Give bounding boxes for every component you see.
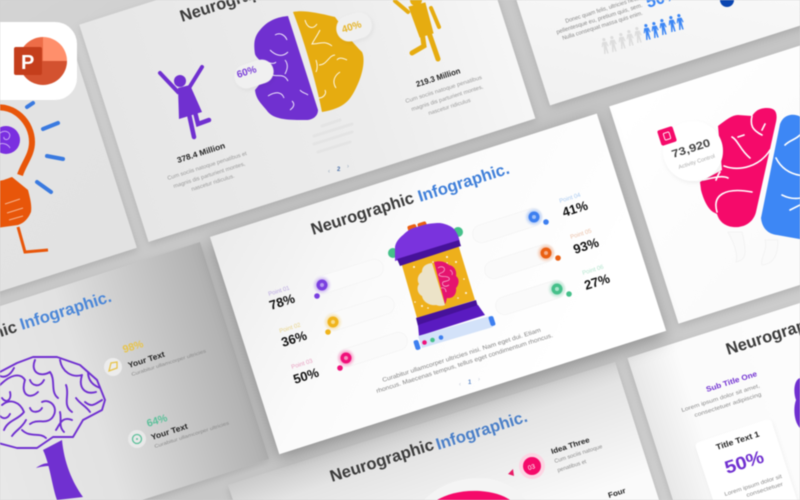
brain folds <box>438 267 452 292</box>
bubble: 40%: 40% <box>341 19 363 36</box>
panel: bottom center slide <box>328 408 627 500</box>
panel: top slide with gender brain <box>160 0 485 193</box>
point 01 <box>267 278 330 313</box>
jar body <box>401 244 475 318</box>
callout: 73,920: Activity Control <box>678 154 716 171</box>
card: title text 1: Title Text 1 <box>715 429 761 452</box>
icon: outline brain <box>0 357 105 448</box>
knobs <box>388 221 463 258</box>
text: idea three <box>550 435 603 474</box>
point 05: 93% <box>571 235 601 257</box>
brain right half <box>434 261 459 304</box>
node: 03 <box>508 453 545 479</box>
icon: blue rays <box>27 103 63 192</box>
stat: 64%: Your Text <box>150 422 189 442</box>
point 03: 50% <box>291 365 321 387</box>
card: title text 1 <box>696 420 797 500</box>
text block: description: rhoncus. Maecenas tempus, tellus eget condimentum rhoncus. <box>376 333 554 395</box>
icon: tree stem <box>36 440 83 500</box>
icon: PowerPoint app tile <box>0 22 77 100</box>
text: idea three: penatibus et <box>557 459 588 474</box>
icon: faint roots <box>728 232 778 265</box>
panel: bottom right slide <box>681 309 800 500</box>
plinth <box>418 316 493 348</box>
brain left half <box>418 263 445 306</box>
brain: blue half <box>761 115 800 240</box>
stat: 64% <box>128 412 231 450</box>
icon: brain jar <box>388 221 496 351</box>
text block: left description: Cum sociis natoque penatibus et <box>167 151 248 182</box>
card: title text 1: Lorem ipsum dolor sit <box>724 474 783 498</box>
text block: Lorem ipsum dolor sit amet, <box>681 383 761 414</box>
point 04 <box>526 192 590 225</box>
point 05 <box>538 228 601 261</box>
pagination: 1 <box>468 380 472 386</box>
stat: 64%: Curabitur ullamcorper ultricies <box>154 420 231 450</box>
stat: 98%: Your Text <box>127 350 166 370</box>
icon: faint bulb base <box>314 120 352 152</box>
icon: blue circle <box>720 0 734 7</box>
point 06: Point 06 <box>582 264 605 277</box>
brain: pink half <box>700 108 777 227</box>
subtitle: Sub Title One <box>705 369 758 394</box>
text: idea four: Four <box>607 486 627 500</box>
point 03 <box>291 350 354 387</box>
label: 219.3 Million: 219.3 Million <box>415 66 462 89</box>
powerpoint logo: P <box>21 52 34 74</box>
pagination: ‹ <box>459 382 461 388</box>
text block: right description: magnis dis parturient montes, <box>411 84 485 113</box>
pagination: › <box>478 377 480 383</box>
bubble: 40% <box>333 9 375 45</box>
bubble: 60% <box>231 56 277 92</box>
pagination: › <box>347 164 349 170</box>
jar base <box>418 305 485 336</box>
point 02: 36% <box>279 328 309 350</box>
card: title text 1: 50% <box>722 447 766 478</box>
point 01: 78% <box>267 291 297 313</box>
panel: top right slide <box>556 0 734 54</box>
icon: man <box>395 0 439 59</box>
plinth lights <box>422 335 443 345</box>
handles <box>413 315 496 351</box>
point 04: Point 04 <box>559 192 582 205</box>
text block <box>681 383 762 419</box>
text block: left description: nascetur ridiculus. <box>191 173 236 193</box>
text: idea three: Idea Three <box>550 435 591 456</box>
point 05: Point 05 <box>570 228 593 241</box>
pictogram: people <box>600 13 685 54</box>
point 04: 41% <box>560 198 590 220</box>
point 02 <box>279 314 340 350</box>
pagination: 2 <box>337 167 341 173</box>
base band <box>416 300 478 326</box>
dome band <box>397 240 461 266</box>
point 03: Point 03 <box>291 358 314 371</box>
pagination <box>328 164 349 175</box>
icon: pink square <box>657 126 677 146</box>
panel: left tree brain slide <box>0 288 231 500</box>
stat: 98%: 98% <box>121 338 146 356</box>
icon: woman <box>160 67 209 137</box>
title <box>0 288 114 368</box>
text block: right description: Cum sociis natoque penatibus <box>405 75 483 105</box>
icon: pink brain <box>424 478 526 500</box>
sparkles <box>413 256 467 309</box>
text block: right description: nascetur ridiculus <box>428 98 472 117</box>
text block: right description <box>405 75 485 117</box>
text block: Nulla consequat massa quis enim. <box>562 11 644 42</box>
point 01: Point 01 <box>268 285 291 298</box>
card: title text 1: consectetuer <box>746 482 784 499</box>
pagination: ‹ <box>328 169 330 175</box>
node: 03: 03 <box>527 463 536 472</box>
stat: 98%: Curabitur ullamcorper ultricies <box>131 348 208 378</box>
pagination <box>459 377 480 388</box>
text block: left description: magnis dis parturient montes, <box>173 161 247 190</box>
brain: purple and gold halves <box>254 11 364 120</box>
title <box>328 408 530 486</box>
text block: pellentesque eu, pretium quis, sem. <box>556 3 644 36</box>
stat: 98% <box>104 338 208 378</box>
title: Infographic. <box>434 408 530 454</box>
label: 378.4 Million: 378.4 Million <box>176 141 226 165</box>
point 06: 27% <box>582 271 612 293</box>
text: idea three: Cum sociis natoque <box>554 444 603 465</box>
bubble: 60%: 60% <box>236 64 258 81</box>
panel: center main slide <box>267 160 612 395</box>
callout: 73,920: 73,920 <box>670 137 712 161</box>
icon: purple blob <box>794 378 800 428</box>
text block: consectetuer adipiscing <box>694 392 762 419</box>
title: Infographic. <box>416 160 512 206</box>
point 02: Point 02 <box>279 322 302 335</box>
text block: left description <box>167 151 248 193</box>
neumorphic pills <box>312 206 567 369</box>
title <box>309 160 512 239</box>
icon: light bulb <box>0 107 48 252</box>
point 06 <box>550 264 612 297</box>
title: Neurographic <box>309 189 416 239</box>
jar dome <box>395 223 460 261</box>
panel: lightbulb slide <box>0 103 63 252</box>
stat: 64%: 64% <box>145 412 170 430</box>
title: Neurographic <box>328 436 436 486</box>
callout: 73,920 <box>663 121 723 181</box>
title: Infographic. <box>18 288 114 334</box>
text block: description: Curabitur ullamcorper ultricies nisi. Nam eget dui. Etiam <box>382 328 542 384</box>
panel: right brain slide <box>657 108 800 265</box>
